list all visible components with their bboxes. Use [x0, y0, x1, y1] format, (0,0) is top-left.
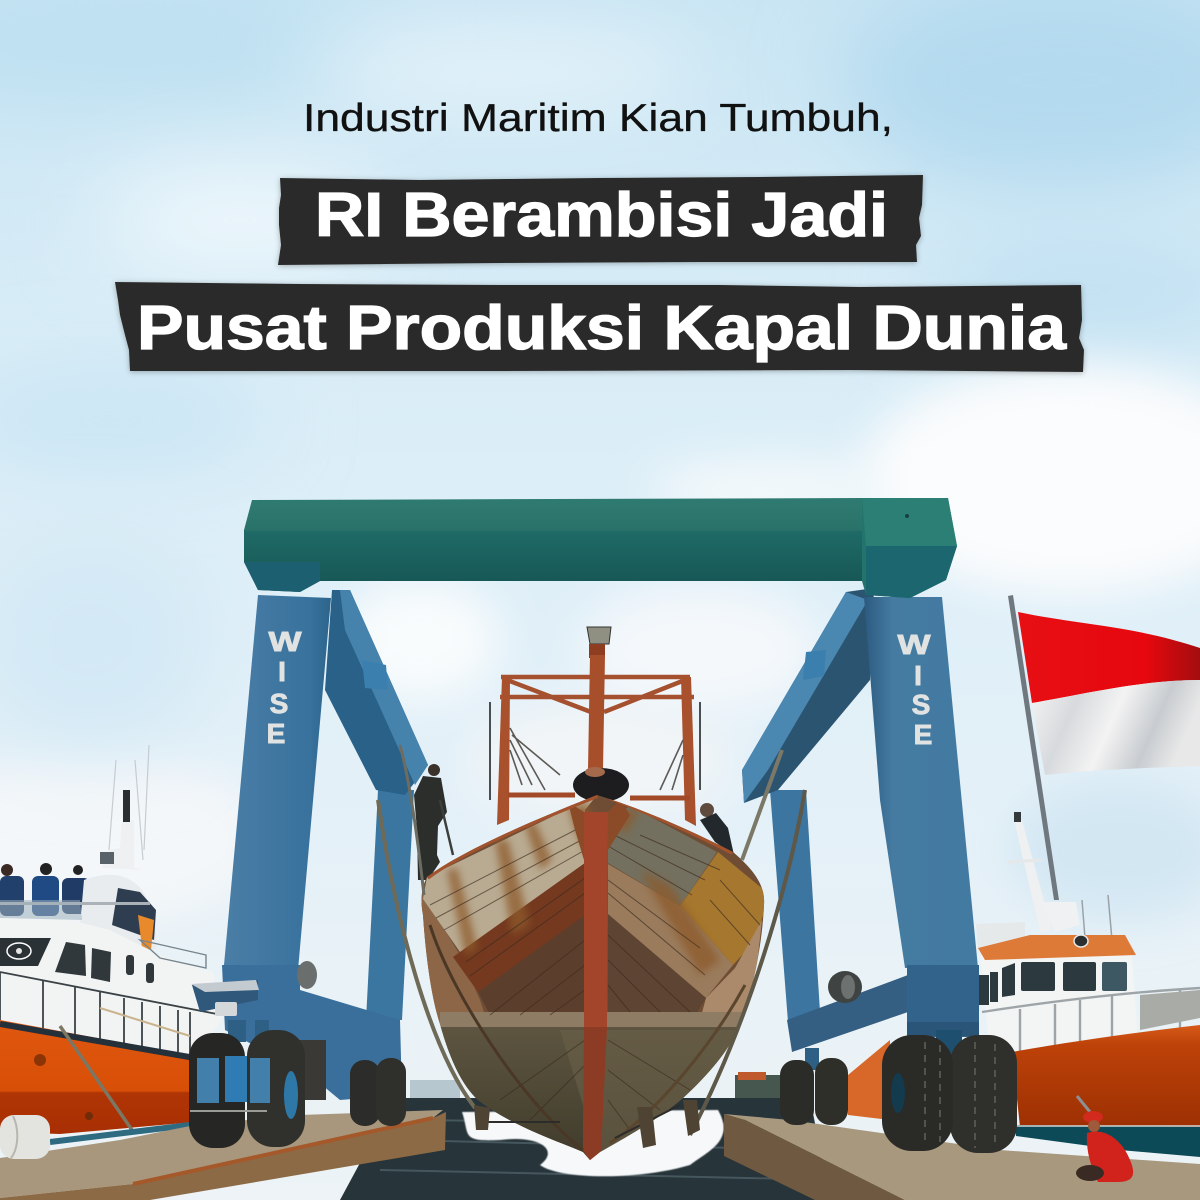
- cylinders on dock: [0, 1115, 50, 1159]
- heading: intro line: Industri Maritim Kian Tumbuh,: [303, 97, 893, 140]
- worker right: [700, 803, 734, 855]
- rust streaks: [447, 805, 720, 975]
- flagpole: [1008, 595, 1059, 900]
- hull right upper panel: [608, 806, 717, 906]
- cabin windows: [979, 962, 1127, 1005]
- mooring rope: [60, 1026, 132, 1130]
- gantry front left leg: [224, 595, 331, 970]
- gantry top beam: [244, 498, 957, 598]
- right boat: [976, 595, 1200, 1157]
- gunwale: [427, 795, 597, 877]
- orange hull: [1012, 1025, 1200, 1127]
- blue hose on dock: [50, 1125, 190, 1142]
- mast lamp: [587, 627, 611, 644]
- plank seams: [430, 825, 760, 1130]
- keel stem: [583, 812, 608, 1162]
- left boat: [0, 745, 222, 1142]
- logo panel: [0, 938, 51, 966]
- waterline band: [440, 1012, 760, 1027]
- lifting straps: [378, 745, 805, 1150]
- hull right cream band: [608, 864, 733, 998]
- hull left lower planks: [478, 915, 585, 1015]
- worker left: [414, 764, 453, 880]
- label: WISE right: I: [914, 660, 922, 691]
- gantry front right leg: [864, 597, 978, 968]
- mast: [1008, 812, 1112, 940]
- right gantry chassis: [780, 965, 1017, 1153]
- orange hull: [0, 1020, 195, 1134]
- label: WISE right: S: [912, 689, 930, 720]
- orange roof: [978, 935, 1136, 960]
- teal boot stripe: [1015, 1125, 1200, 1157]
- cabin: [976, 922, 1025, 950]
- tyre fender: [573, 768, 629, 802]
- left dock: [0, 1110, 446, 1200]
- front wheels right: [882, 1035, 1017, 1153]
- bulwark railing: [0, 972, 222, 1054]
- label: WISE left: W: [268, 626, 302, 657]
- label: WISE left: S: [270, 688, 288, 719]
- wooden hull: [422, 795, 764, 1160]
- hull left brown band: [453, 863, 585, 992]
- label: WISE right: [898, 629, 932, 750]
- gantry rear legs: [366, 790, 820, 1022]
- heading tape: line 2: [115, 282, 1084, 372]
- hull supports: [474, 1100, 700, 1148]
- white superstructure: [0, 918, 222, 1058]
- distant harbour: [410, 1040, 890, 1120]
- mast: [100, 745, 149, 870]
- label: WISE left: I: [278, 656, 286, 687]
- rear wheels left: [350, 1058, 406, 1126]
- hull left outer belly: [422, 894, 484, 1096]
- gantry right brace: [742, 588, 874, 803]
- right dock: [724, 1114, 1200, 1200]
- gantry left brace: [325, 590, 428, 795]
- left gantry chassis: [189, 961, 406, 1148]
- cabin windows: [55, 942, 154, 983]
- label: WISE left: E: [267, 718, 285, 749]
- front wheels left: [189, 1030, 305, 1148]
- hull right lower planks: [608, 914, 706, 1014]
- below waterline: [440, 1027, 736, 1160]
- hull right rust panel: [680, 852, 770, 965]
- crew on deck: [0, 863, 90, 916]
- heading tape: line 1: RI Berambisi Jadi: [315, 181, 888, 250]
- deck railing: [982, 988, 1200, 1052]
- heading tape: line 1: [278, 175, 923, 265]
- flag: Indonesia: [1018, 612, 1200, 775]
- boat rigging frame: [490, 627, 700, 826]
- label: WISE left: [267, 626, 302, 749]
- rear wheels right: [780, 1058, 848, 1125]
- label: WISE right: E: [914, 719, 932, 750]
- upper cabin: [80, 875, 156, 950]
- label: WISE right: W: [898, 629, 931, 660]
- heading tape: line 2: Pusat Produksi Kapal Dunia: [137, 294, 1067, 363]
- water: [340, 1098, 840, 1200]
- seated figure in red: [1076, 1096, 1133, 1182]
- hull left upper planks: [423, 795, 597, 952]
